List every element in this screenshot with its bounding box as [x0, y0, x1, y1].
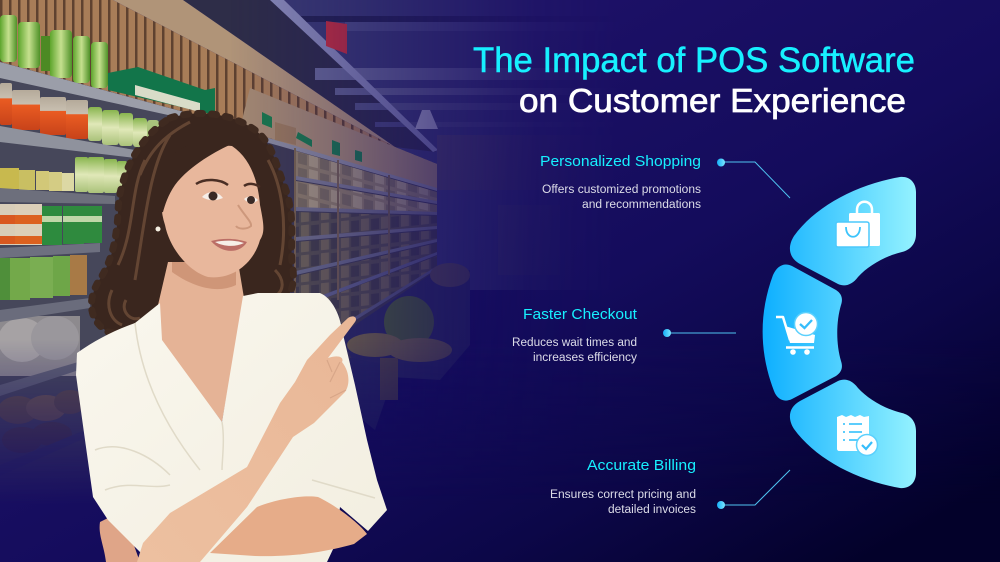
neck shadow [172, 262, 236, 289]
heading: Accurate Billing [587, 457, 696, 474]
connector: Accurate Billing [717, 470, 790, 509]
item: Faster Checkout [512, 306, 638, 364]
heading: Faster Checkout [523, 306, 638, 323]
hair fringe [153, 139, 232, 212]
blouse folds [95, 323, 375, 498]
panel: middle arc segment [763, 264, 842, 401]
overlay: bottom navy fade [0, 349, 398, 562]
item: Personalized Shopping [540, 153, 701, 211]
description: Reduces wait times and [512, 337, 637, 349]
ledge [113, 0, 395, 147]
lamp [415, 110, 438, 129]
hair [91, 113, 293, 333]
description [550, 489, 696, 516]
neck and chest [158, 262, 244, 422]
title line 2: on Customer Experience [519, 82, 906, 119]
blouse [76, 293, 387, 562]
upper forearm and pointing hand [137, 316, 356, 562]
description: Ensures correct pricing and [550, 489, 696, 501]
heading: Personalized Shopping [540, 153, 701, 170]
description [542, 184, 701, 211]
sign: red hanging sign [326, 21, 347, 54]
left shelf backing [0, 62, 296, 562]
earring [156, 226, 160, 232]
description [512, 337, 637, 364]
connector: Faster Checkout [663, 329, 736, 337]
plants and produce [340, 263, 470, 430]
left shelf products [0, 15, 215, 453]
icon: cart with checkmark [776, 312, 818, 355]
icon: shopping bags [836, 202, 880, 247]
item: Accurate Billing [550, 457, 696, 516]
teeth [215, 241, 244, 246]
wall fade [240, 88, 437, 190]
photo: supermarket aisle [0, 0, 640, 562]
title line 1: The Impact of POS Software [473, 41, 915, 80]
panel: top arc segment [790, 177, 916, 285]
right shelf units [262, 112, 437, 400]
nose [236, 205, 251, 229]
panel: bottom arc segment [790, 380, 916, 488]
woman pointing [76, 113, 387, 562]
ceiling [183, 0, 640, 170]
left hand [100, 518, 140, 562]
description: detailed invoices [608, 504, 696, 516]
knuckle lines [327, 360, 346, 398]
title [473, 41, 915, 119]
icon: billing checklist [837, 415, 878, 456]
lower forearm [210, 496, 367, 556]
face [162, 146, 263, 277]
wood wall [0, 0, 437, 190]
hair highlights [109, 122, 284, 325]
overlay: horizontal navy fade [254, 0, 640, 410]
connector: Personalized Shopping [717, 158, 790, 198]
description: and recommendations [582, 199, 701, 211]
eyes [196, 180, 260, 204]
description: Offers customized promotions [542, 184, 701, 196]
mouth [211, 239, 247, 251]
back wall and far aisle [437, 135, 640, 290]
description: increases efficiency [533, 352, 637, 364]
left shelf boards [0, 62, 200, 476]
